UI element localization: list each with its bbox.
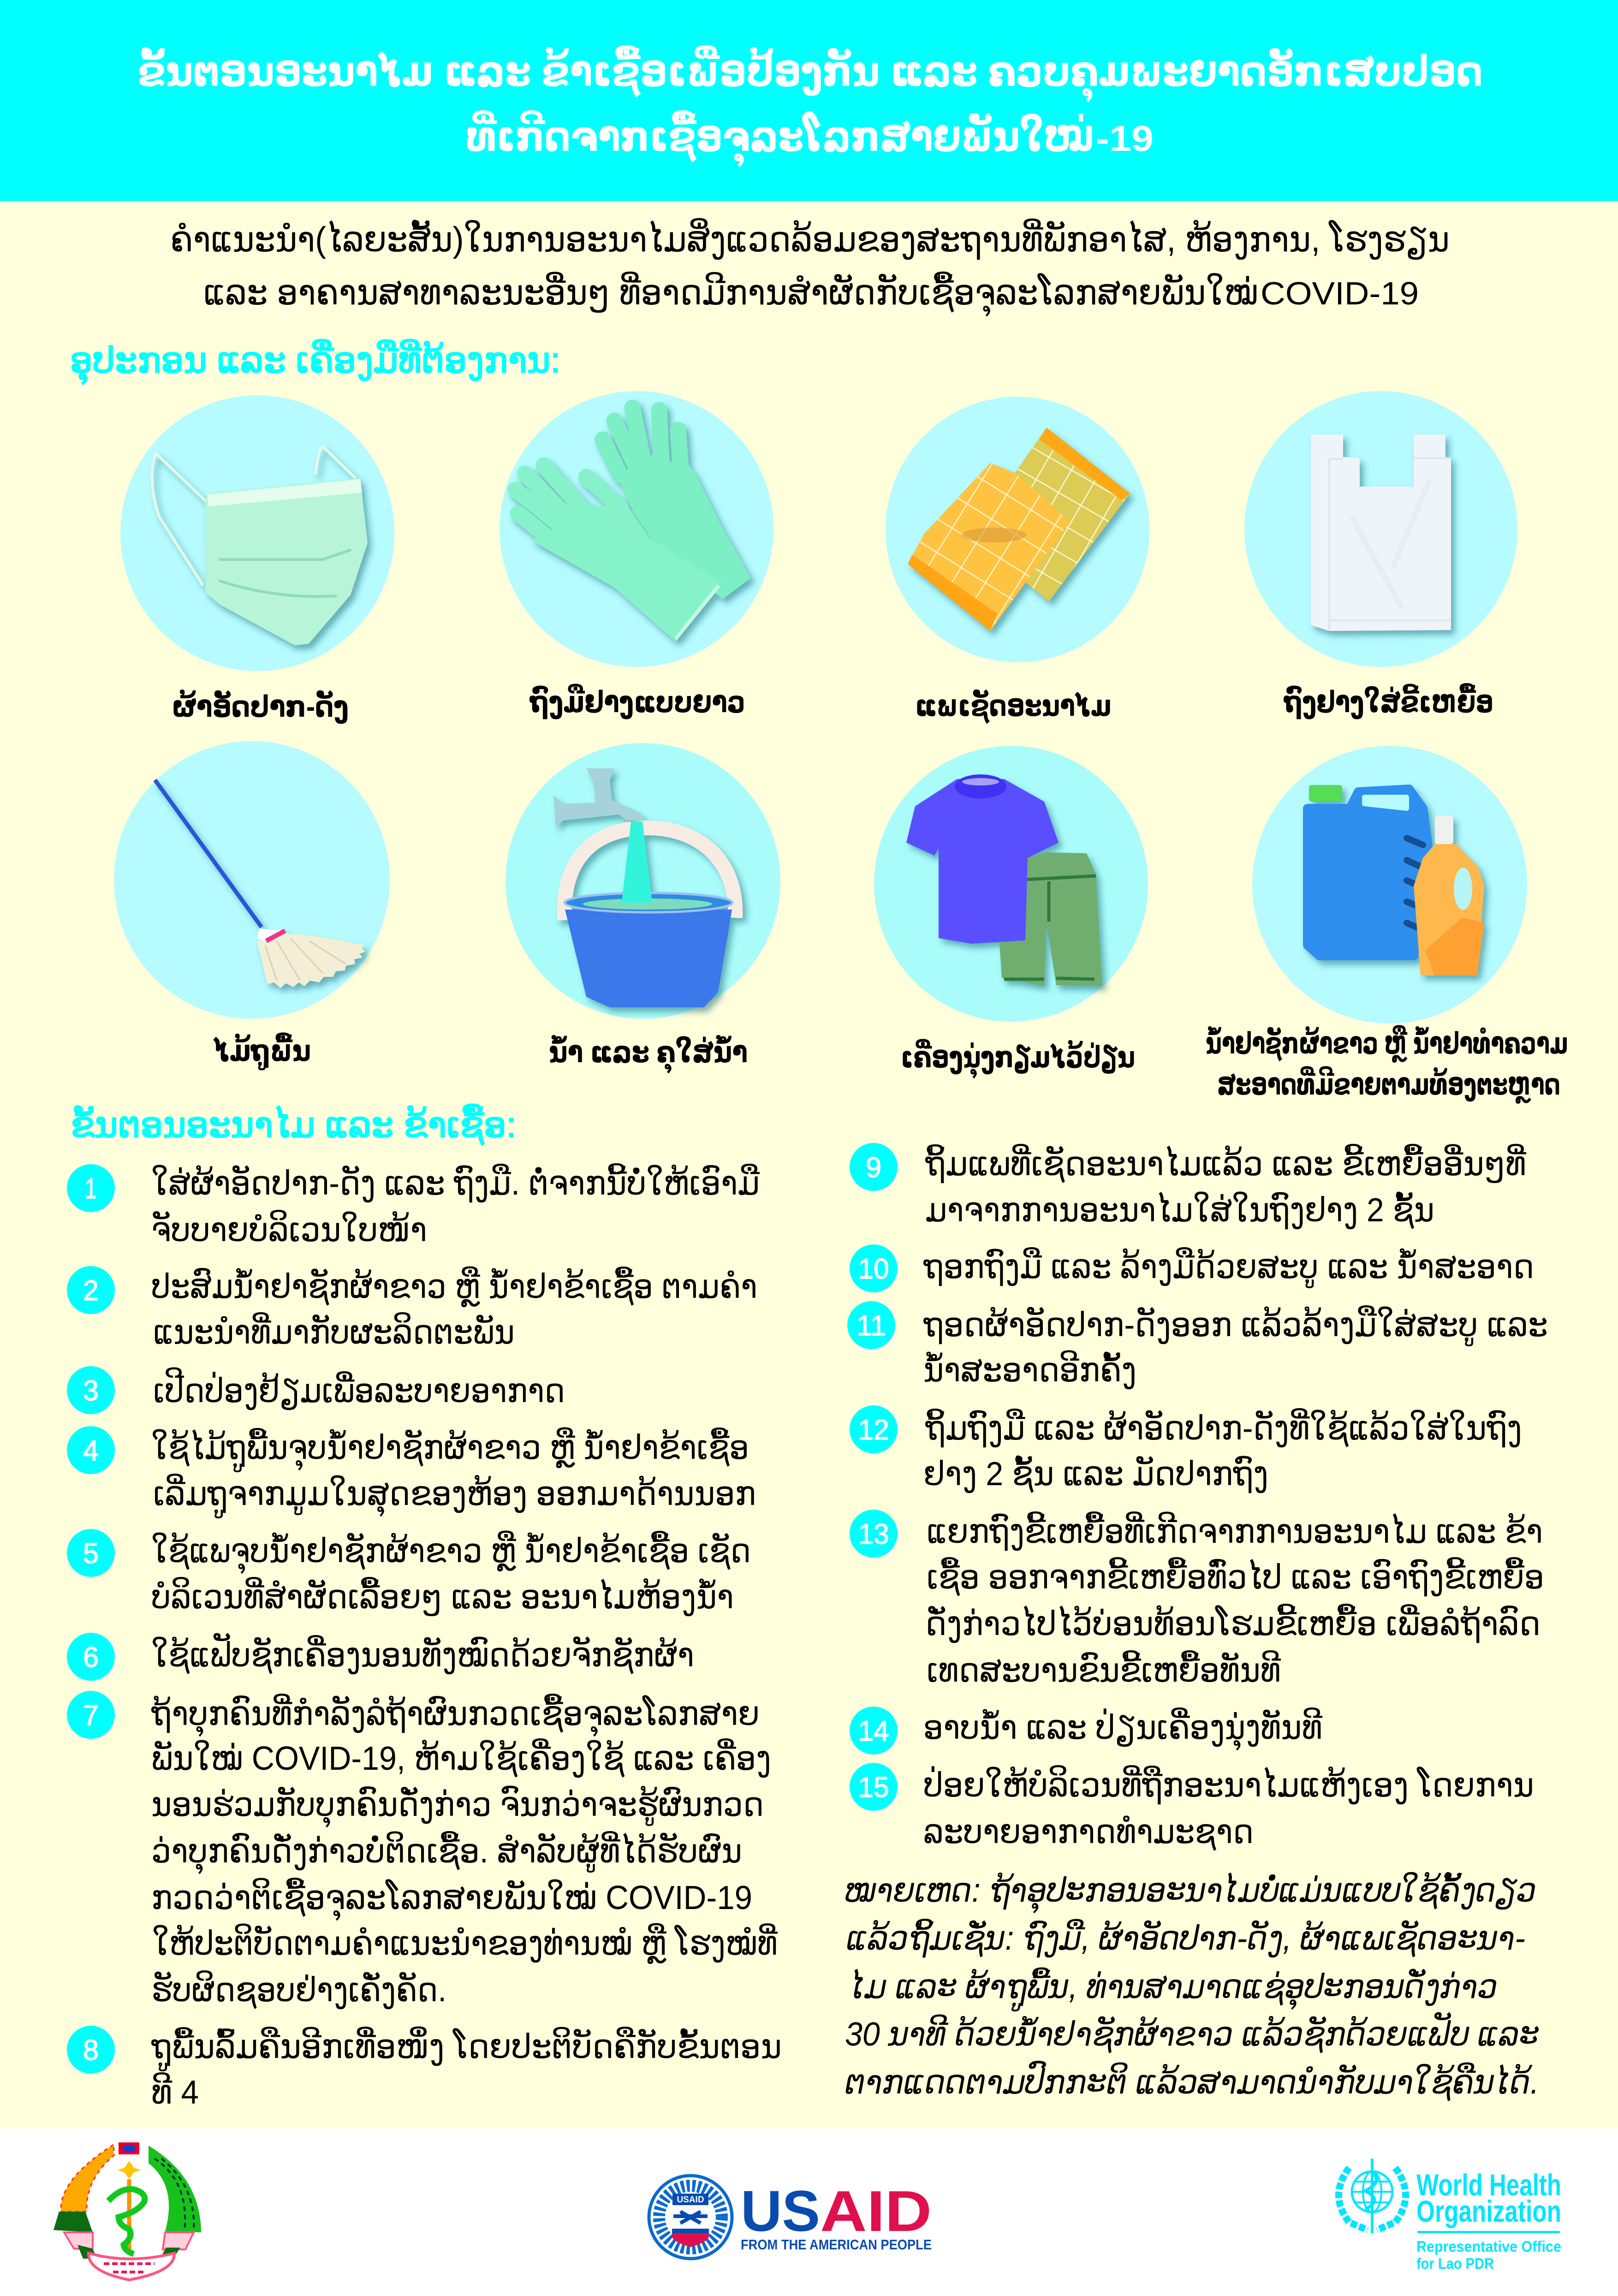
title line 2: ທີ່ເກີດຈາກເຊື້ອຈຸລະໂລກສາຍພັນໃໝ່ (466, 109, 1094, 168)
item: water bucket (506, 743, 780, 1074)
label: ແພເຊັດອະນາໄມ (915, 689, 1112, 724)
logo: World Health Organization: Organization (1416, 2194, 1561, 2228)
step 4: ເລີ່ມຖູຈາກມູມໃນສຸດຂອງຫ້ອງ ອອກມາດ້ານນອກ (153, 1474, 756, 1518)
step 2 (67, 1266, 757, 1351)
step 13 (850, 1510, 1544, 1689)
label (1206, 1025, 1568, 1104)
step 11: ນ້ຳສະອາດອີກຄັ້ງ (923, 1350, 1136, 1389)
title line 1: ຂັ້ນຕອນອະນາໄມ ແລະ ຂ້າເຊື້ອເພື່ອປ້ອງກັນ ແລະ ຄວບຄຸມພະຍາດອັກເສບປອດ (137, 44, 1483, 103)
icon: checked cloths (908, 428, 1130, 631)
step 1: ໃສ່ຜ້າອັດປາກ-ດັງ ແລະ ຖົງມື. ຕໍ່ຈາກນີ້ບໍ່ໃຫ້ເອົາມື (151, 1164, 760, 1202)
heading: equipment: ອຸປະກອນ ແລະ ເຄື່ອງມືທີ່ຕ້ອງການ: (70, 339, 560, 385)
intro text: ແລະ ອາຄານສາທາລະນະອື່ນໆ ທີ່ອາດມີການສຳຜັດກັບເຊື້ອຈຸລະໂລກສາຍພັນໃໝ່ (203, 271, 1258, 317)
intro text (170, 218, 1450, 317)
label: ນ້ຳ ແລະ ຄຸໃສ່ນ້ຳ (549, 1035, 748, 1074)
step 13: ແຍກຖົງຂີ້ເຫຍື້ອທີ່ເກີດຈາກການອະນາໄມ ແລະ ຂ້າ (927, 1512, 1543, 1551)
step 15: 15 (858, 1772, 889, 1803)
USAID seal: USAID (677, 2195, 704, 2205)
step 7: ໃຫ້ປະຕິບັດຕາມຄຳແນະນຳຂອງທ່ານໝໍ ຫຼື ໂຮງໝໍທີ່ (152, 1924, 778, 1964)
step 13: 13 (858, 1518, 889, 1550)
intro text: ຄຳແນະນຳ(ໄລຍະສັ້ນ)ໃນການອະນາໄມສິ່ງແວດລ້ອມຂອງສະຖານທີ່ພັກອາໄສ, ຫ້ອງການ, ໂຮງຮຽນ (170, 218, 1450, 260)
step 11: 11 (857, 1310, 886, 1342)
step 13: ເຊື້ອ ອອກຈາກຂີ້ເຫຍື້ອທົ່ວໄປ ແລະ ເອົາຖົງຂີ້ເຫຍື້ອ (927, 1558, 1544, 1596)
note (844, 1872, 1539, 2101)
step 3: ເປີດປ່ອງຢ້ຽມເພື່ອລະບາຍອາກາດ (153, 1368, 565, 1410)
label: ຖົງມືຢາງແບບຍາວ (529, 684, 745, 719)
step 7: ຖ້າບຸກຄົນທີ່ກຳລັງລໍຖ້າຜົນກວດເຊື້ອຈຸລະໂລກສາຍ (151, 1694, 760, 1737)
step 3: 3 (83, 1375, 99, 1407)
intro text: COVID-19 (1261, 275, 1419, 311)
icon: rubber gloves (516, 408, 751, 642)
step 6: 6 (83, 1642, 99, 1673)
step 14: ອາບນ້ຳ ແລະ ປ່ຽນເຄື່ອງນຸ່ງທັນທີ (923, 1708, 1322, 1751)
icon: tap and bucket (553, 768, 735, 1007)
note: ໝາຍເຫດ: ຖ້າອຸປະກອນອະນາໄມບໍ່ແມ່ນແບບໃຊ້ຄັ້ງດຽວ (844, 1872, 1536, 1914)
item: mop (114, 741, 390, 1070)
label: ເຄື່ອງນຸ່ງກຽມໄວ້ປ່ຽນ (901, 1039, 1135, 1079)
step 8 (67, 2026, 782, 2111)
step 6 (67, 1633, 694, 1681)
step 6: ໃຊ້ແຟັບຊັກເຄື່ອງນອນທັງໝົດດ້ວຍຈັກຊັກຜ້າ (151, 1633, 694, 1674)
icon: white plastic bag (1311, 434, 1451, 631)
step 11: ຖອດຜ້າອັດປາກ-ດັງອອກ ແລ້ວລ້າງມືໃສ່ສະບູ ແລະ (923, 1306, 1548, 1346)
step 1 (67, 1164, 760, 1249)
logo: World Health Organization: for Lao PDR (1416, 2255, 1494, 2272)
step 13: ເທດສະບານຂົນຂີ້ເຫຍື້ອທັນທີ (927, 1651, 1281, 1689)
step 14 (850, 1707, 1322, 1755)
note: ຕາກແດດຕາມປົກກະຕິ ແລ້ວສາມາດນຳກັບມາໃຊ້ຄືນໄດ້. (845, 2060, 1539, 2101)
icon: face mask (152, 446, 368, 645)
step 5: ບໍລິເວນທີ່ສຳຜັດເລື້ອຍໆ ແລະ ອະນາໄມຫ້ອງນ້ຳ (151, 1577, 734, 1616)
step 5: 5 (83, 1538, 99, 1570)
step 5: ໃຊ້ແພຈຸບນ້ຳຢາຊັກຜ້າຂາວ ຫຼື ນ້ຳຢາຂ້າເຊື້ອ ເຊັດ (151, 1531, 751, 1574)
note: ແລ້ວຖິ້ມເຊັ່ນ: ຖົງມື, ຜ້າອັດປາກ-ດັງ, ຜ້າແພເຊັດອະນາ- (846, 1919, 1525, 1957)
logo: Lao health ministry emblem (54, 2142, 201, 2280)
step 4: 4 (83, 1435, 99, 1467)
logo: USAID: FROM THE AMERICAN PEOPLE (741, 2237, 932, 2253)
step 8: 8 (83, 2034, 99, 2066)
step 13: ດັ່ງກ່າວໄປໄວ້ບ່ອນທ້ອນໂຮມຂີ້ເຫຍື້ອ ເພື່ອລໍຖ້າລົດ (925, 1604, 1541, 1643)
step 5 (67, 1529, 751, 1616)
step 7: 7 (83, 1700, 99, 1731)
label: ຖົງຢາງໃສ່ຂີ້ເຫຍື້ອ (1283, 683, 1493, 719)
step 4 (67, 1426, 756, 1518)
footer (0, 2128, 1618, 2296)
icon: shirt and trousers (906, 774, 1102, 986)
step 15: ລະບາຍອາກາດທຳມະຊາດ (923, 1814, 1254, 1851)
step 1: ຈັບບາຍບໍລິເວນໃບໜ້າ (151, 1210, 427, 1249)
step 2: ປະສົມນ້ຳຢາຊັກຜ້າຂາວ ຫຼື ນ້ຳຢາຂ້າເຊື້ອ ຕາມຄຳ (151, 1267, 757, 1307)
logo: USAID: AID (820, 2179, 932, 2243)
step 12: ຖິ້ມຖົງມື ແລະ ຜ້າອັດປາກ-ດັງທີ່ໃຊ້ແລ້ວໃສ່ໃນຖົງ (925, 1409, 1522, 1447)
step 10: 10 (858, 1253, 889, 1285)
logo: USAID: US (741, 2179, 820, 2243)
step 12 (850, 1405, 1522, 1493)
icon: mop (155, 780, 365, 988)
logo: World Health Organization: World Health (1416, 2168, 1561, 2202)
step 2: ແນະນຳທີ່ມາກັບຜະລິດຕະພັນ (153, 1313, 515, 1351)
step 8: ຖູພື້ນລົ້ມຄືນອີກເທື່ອໜຶ່ງ ໂດຍປະຕິບັດຄືກັບຂັ້ນຕອນ (151, 2027, 782, 2071)
icon: jug and bottle (1308, 785, 1484, 976)
USAID seal (649, 2176, 732, 2259)
step 10 (850, 1244, 1534, 1292)
item: detergent bottles (1206, 746, 1568, 1104)
note: ໄມ ແລະ ຜ້າຖູພື້ນ, ທ່ານສາມາດແຊ່ອຸປະກອນດັ່ງກ່າວ (849, 1967, 1498, 2011)
step 9: 9 (866, 1152, 881, 1184)
item: spare clothes (874, 746, 1148, 1079)
step 9: ຖິ້ມແພທີ່ເຊັດອະນາໄມແລ້ວ ແລະ ຂີ້ເຫຍື້ອອື່ນໆທີ່ (925, 1144, 1526, 1183)
step 7: ພັນໃໝ່ COVID-19, ຫ້າມໃຊ້ເຄື່ອງໃຊ້ ແລະ ເຄື່ອງ (151, 1739, 771, 1778)
label: ຜ້າອັດປາກ-ດັງ (172, 690, 349, 724)
label: ໄມ້ຖູພື້ນ (213, 1032, 311, 1070)
step 9 (850, 1143, 1526, 1229)
step 3 (67, 1366, 565, 1414)
step 7: ຮັບຜິດຊອບຢ່າງເຄັ່ງຄັດ. (151, 1971, 446, 2009)
step 7: ວ່າບຸກຄົນດັ່ງກ່າວບໍ່ຕິດເຊື້ອ. ສຳລັບຜູ້ທີ່ໄດ້ຮັບຜົນ (151, 1832, 742, 1874)
item: plastic bag (1244, 391, 1517, 719)
step 2: 2 (83, 1275, 99, 1307)
step 1: 1 (85, 1173, 97, 1205)
step 4: ໃຊ້ໄມ້ຖູພື້ນຈຸບນ້ຳຢາຊັກຜ້າຂາວ ຫຼື ນ້ຳຢາຂ້າເຊື້ອ (151, 1428, 749, 1472)
item: cleaning cloth (886, 397, 1149, 724)
header banner (0, 0, 1618, 201)
step 12: ຢາງ 2 ຊັ້ນ ແລະ ມັດປາກຖົງ (923, 1456, 1268, 1493)
WHO emblem (1338, 2159, 1406, 2233)
step 10: ຖອກຖົງມື ແລະ ລ້າງມືດ້ວຍສະບູ ແລະ ນ້ຳສະອາດ (923, 1248, 1534, 1288)
item: gloves (500, 391, 773, 719)
logo: World Health Organization (1338, 2159, 1561, 2272)
step 11 (847, 1301, 1548, 1389)
step 14: 14 (858, 1715, 889, 1747)
note: 30 ນາທີ ດ້ວຍນ້ຳຢາຊັກຜ້າຂາວ ແລ້ວຊັກດ້ວຍແຟັບ ແລະ (845, 2012, 1539, 2053)
item: mask (120, 395, 394, 724)
step 8: ທີ 4 (151, 2073, 199, 2111)
step 9: ມາຈາກການອະນາໄມໃສ່ໃນຖົງຢາງ 2 ຊັ້ນ (925, 1191, 1434, 1229)
title line 2: -19 (1096, 118, 1154, 159)
step 15 (850, 1763, 1534, 1851)
step 7: ນອນຮ່ວມກັບບຸກຄົນດັ່ງກ່າວ ຈົນກວ່າຈະຮູ້ຜົນກວດ (151, 1786, 764, 1828)
step 7: ກວດວ່າຕິເຊື້ອຈຸລະໂລກສາຍພັນໃໝ່ COVID-19 (151, 1878, 752, 1921)
logo: USAID (649, 2176, 932, 2259)
logo: World Health Organization: Representative Office (1416, 2238, 1561, 2255)
heading: steps: ຂັ້ນຕອນອະນາໄມ ແລະ ຂ້າເຊື້ອ: (71, 1104, 516, 1145)
step 15: ປ່ອຍໃຫ້ບໍລິເວນທີ່ຖືກອະນາໄມແຫ້ງເອງ ໂດຍການ (923, 1766, 1534, 1804)
step 7 (67, 1691, 778, 2009)
step 12: 12 (858, 1414, 889, 1446)
